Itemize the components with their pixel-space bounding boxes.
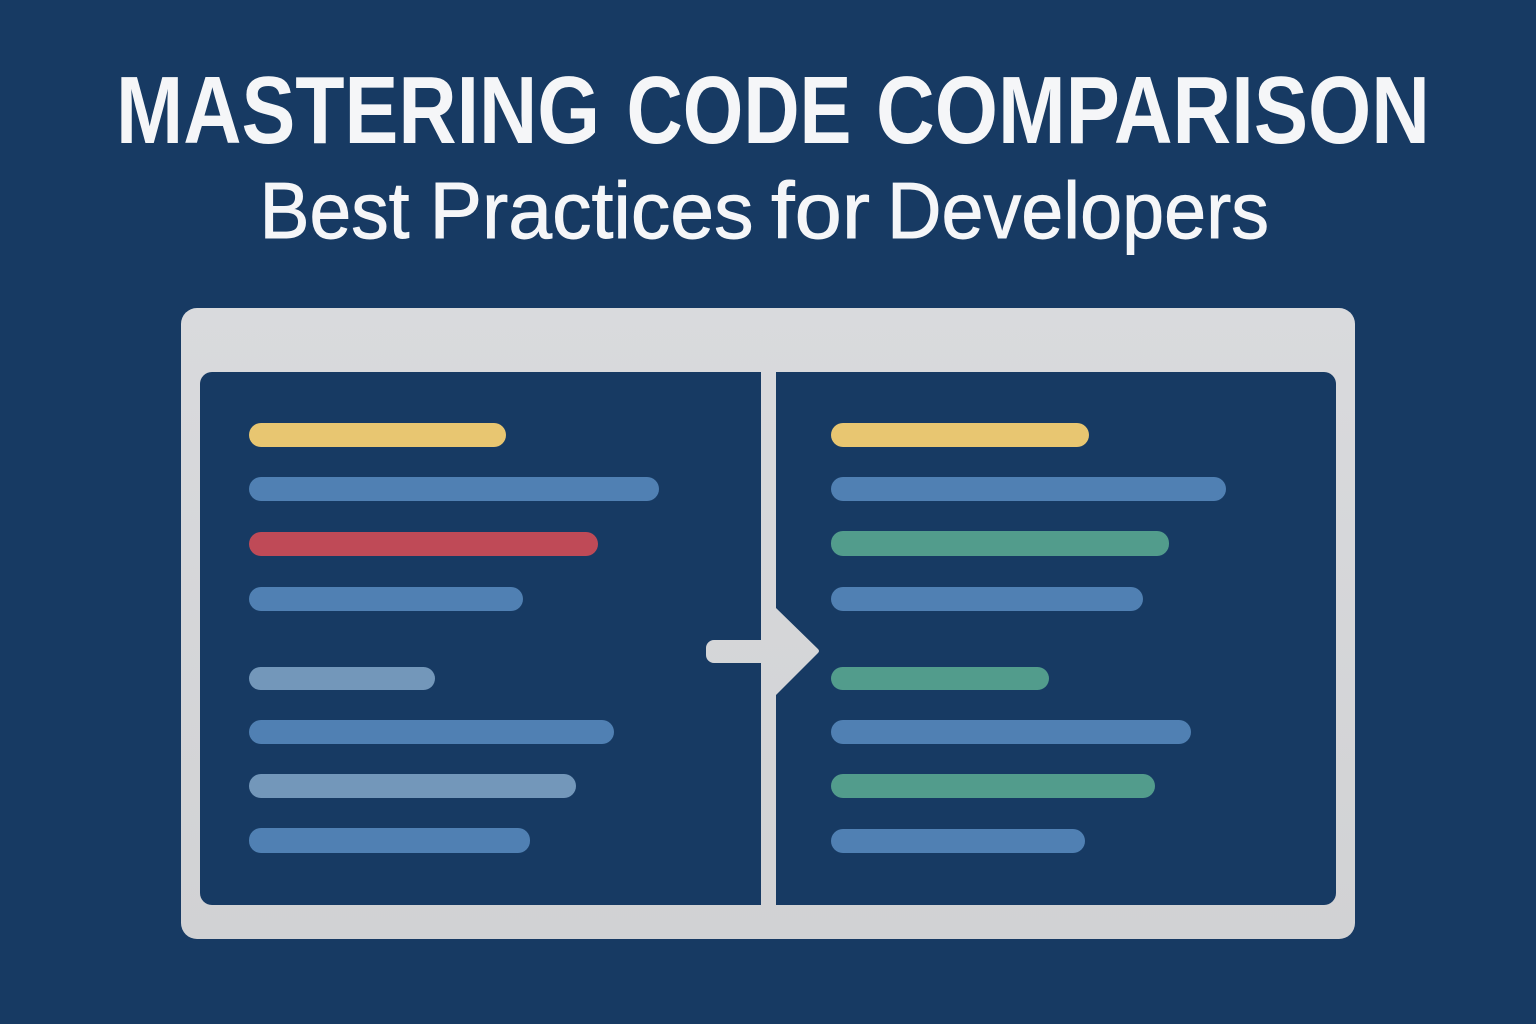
- line 3 red removed: [249, 532, 598, 556]
- line 3 green added: [831, 531, 1169, 556]
- panel: editor window: [181, 308, 1355, 939]
- line 1 yellow: [249, 423, 506, 447]
- window frame: [181, 308, 1355, 939]
- panel: original code: [200, 372, 761, 905]
- line 7 green added: [831, 774, 1155, 798]
- subtitle: Best: [260, 166, 410, 255]
- panel: updated code: [776, 372, 1336, 905]
- title: CODE: [626, 57, 852, 164]
- subtitle: [260, 166, 1269, 255]
- line 6 blue: [249, 720, 614, 744]
- line 7 muted: [249, 774, 576, 798]
- line 5 muted: [249, 667, 435, 690]
- subtitle: for: [771, 166, 870, 255]
- line 8 blue: [249, 828, 530, 853]
- subtitle: Practices: [430, 166, 754, 255]
- line 6 blue: [831, 720, 1191, 744]
- code pane right: [776, 372, 1336, 905]
- line 5 green added: [831, 667, 1049, 690]
- line 4 blue: [831, 587, 1143, 611]
- line 2 blue: [831, 477, 1226, 501]
- arrow: left to right: [706, 608, 819, 695]
- code pane left: [200, 372, 761, 905]
- subtitle: Developers: [887, 166, 1269, 255]
- line 8 blue: [831, 829, 1085, 853]
- title: [116, 57, 1430, 164]
- line 2 blue: [249, 477, 659, 501]
- line 1 yellow: [831, 423, 1089, 447]
- title: MASTERING: [116, 57, 600, 164]
- title: COMPARISON: [876, 57, 1430, 164]
- line 4 blue: [249, 587, 523, 611]
